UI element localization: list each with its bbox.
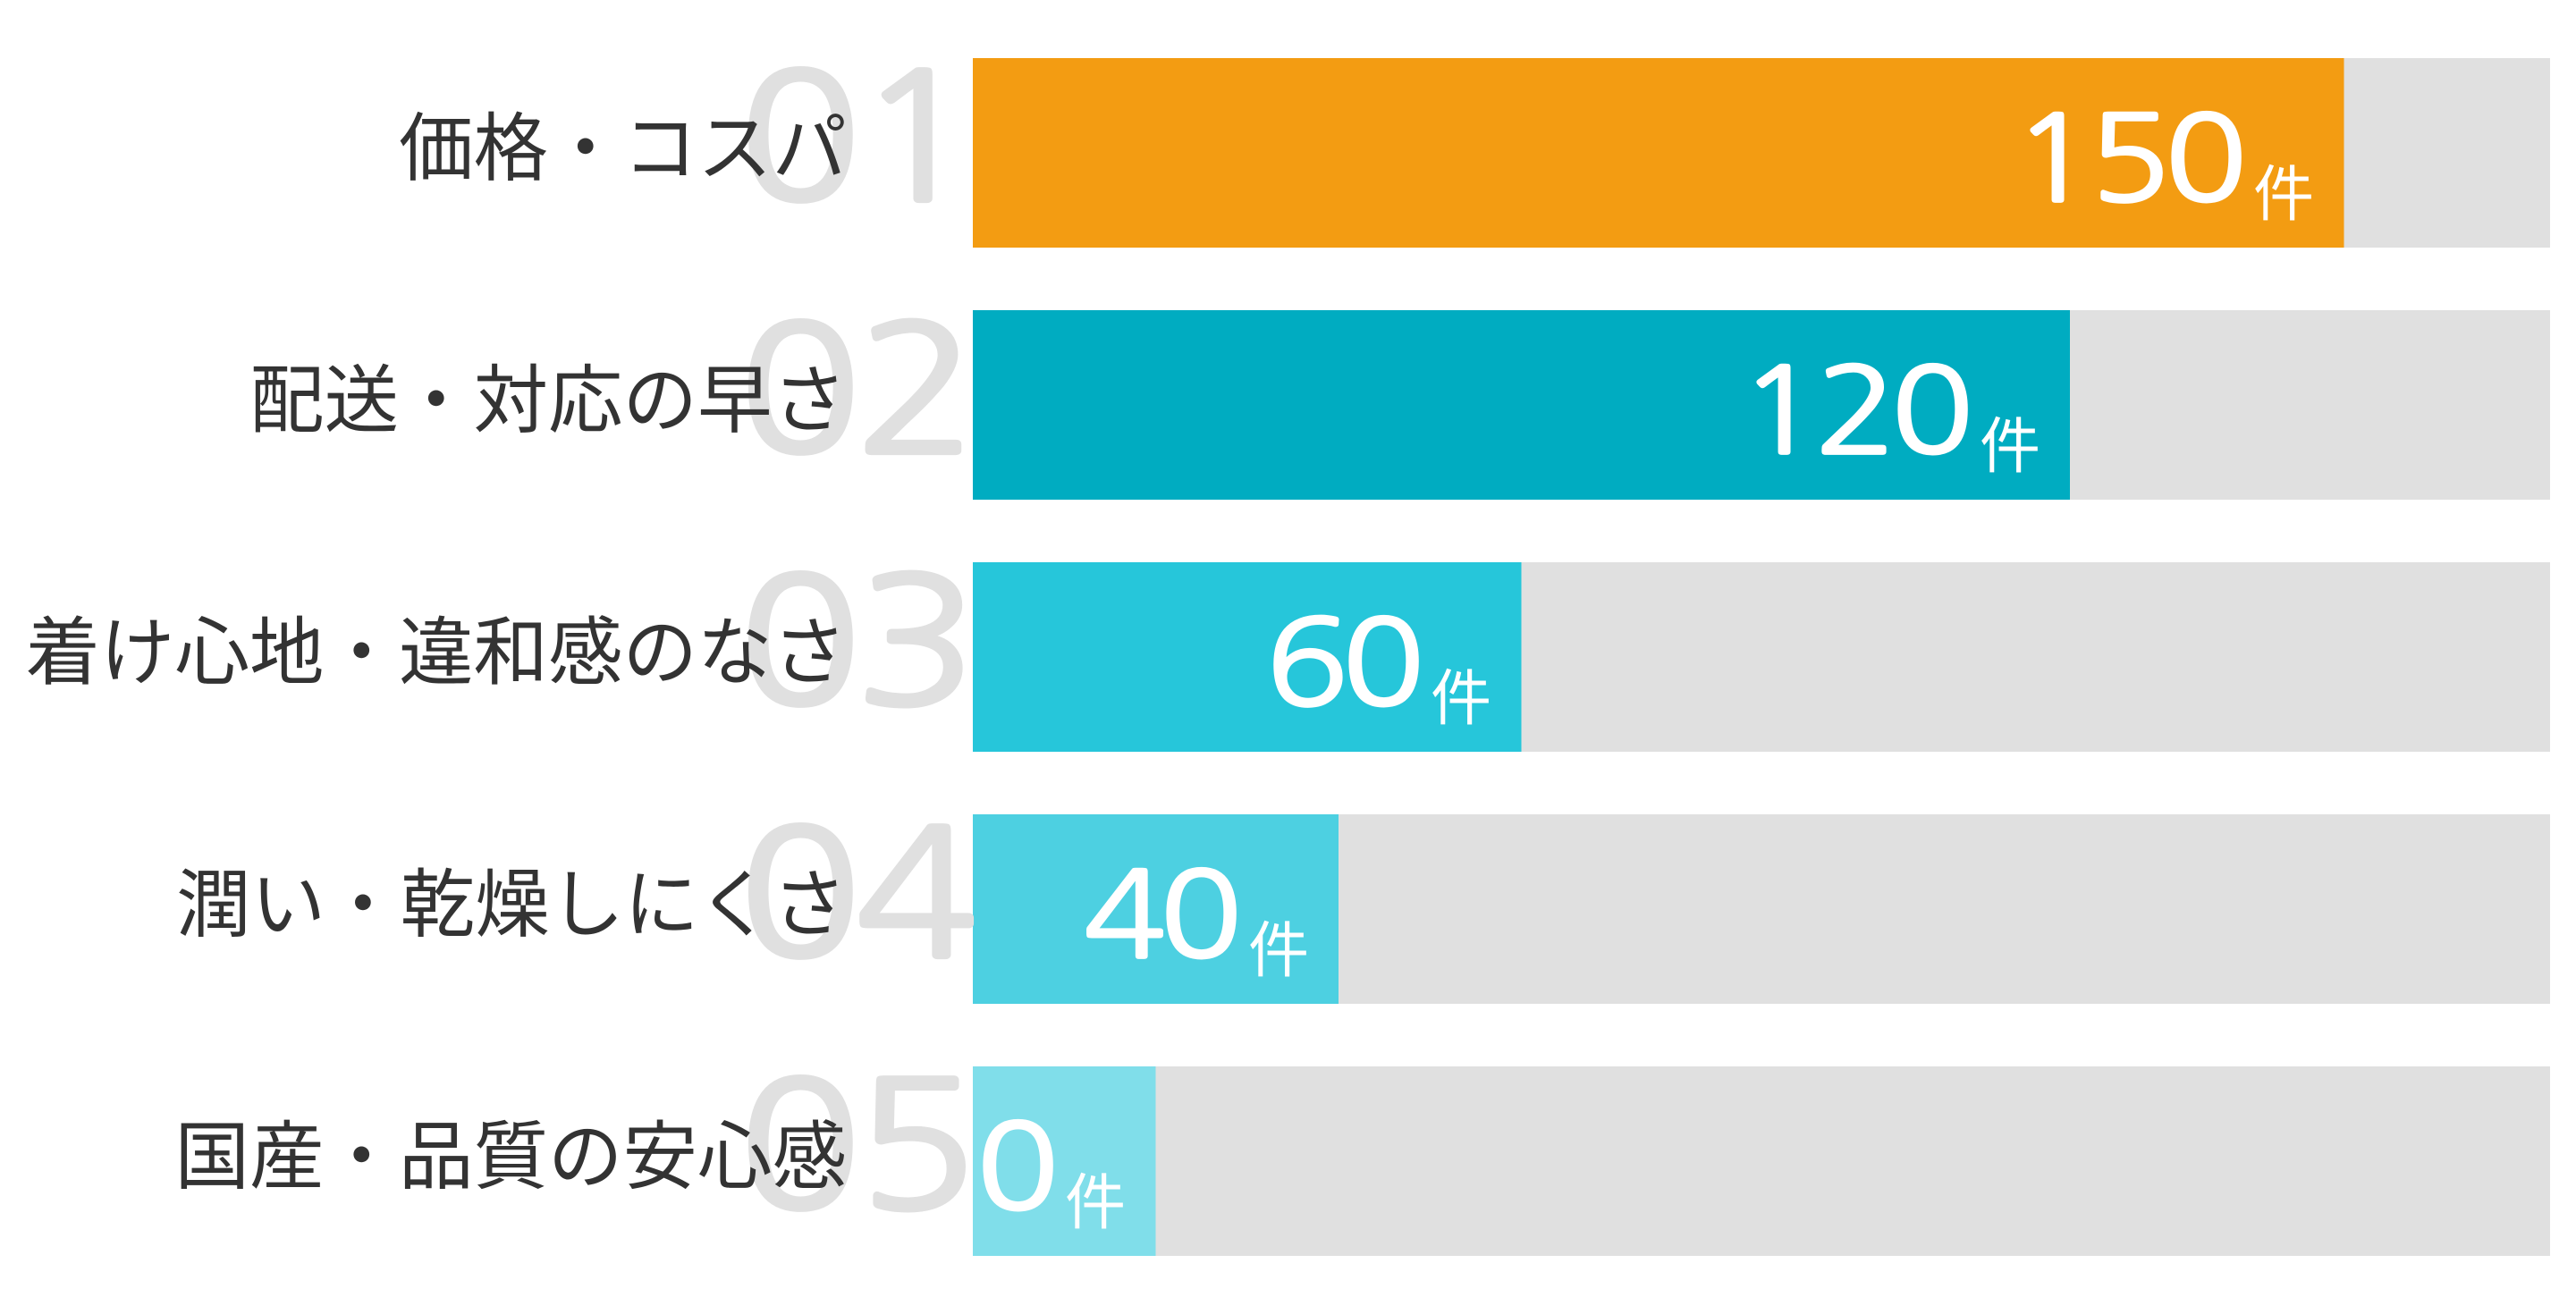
value 3: 60 <box>1266 603 1418 722</box>
label 2: 配送・対応の早さ <box>249 358 847 442</box>
label 5: 国産・品質の安心感 <box>175 1115 847 1199</box>
label 4: 潤い・乾燥しにくさ <box>176 863 847 947</box>
bar fill 1 <box>973 58 2344 248</box>
bar fill 2 <box>973 310 2070 500</box>
unit 2: 件 <box>1980 413 2040 481</box>
rank 03: 03 <box>739 553 972 730</box>
bar track 3 <box>973 562 2550 752</box>
unit 1: 件 <box>2253 161 2314 229</box>
label 3: 着け心地・違和感のなさ <box>25 611 847 695</box>
unit 5: 件 <box>1065 1169 1126 1237</box>
unit 3: 件 <box>1431 665 1491 733</box>
bar track 5 <box>973 1066 2550 1256</box>
bar track 2 <box>973 310 2550 500</box>
rank 02: 02 <box>739 301 972 478</box>
value 1: 150 <box>2012 99 2241 218</box>
bar fill 5 <box>973 1066 1155 1256</box>
rank 05: 05 <box>739 1057 972 1234</box>
rank 01: 01 <box>739 49 972 226</box>
bar fill 3 <box>973 562 1522 752</box>
row 3: comfort <box>25 553 2550 752</box>
value 2: 120 <box>1738 351 1967 470</box>
bar track 4 <box>973 814 2550 1004</box>
unit 4: 件 <box>1248 917 1309 985</box>
bar track 1 <box>973 58 2550 248</box>
label 1: 価格・コスパ <box>399 106 847 190</box>
bar fill 4 <box>973 814 1339 1004</box>
row 1: price and value <box>399 49 2550 248</box>
row 5: domestic quality <box>175 1057 2550 1256</box>
value 5: 20 <box>900 1108 1052 1226</box>
row 2: delivery and response speed <box>249 301 2550 500</box>
row 4: moisture <box>176 805 2550 1004</box>
rank 04: 04 <box>739 805 972 982</box>
value 4: 40 <box>1084 855 1236 974</box>
